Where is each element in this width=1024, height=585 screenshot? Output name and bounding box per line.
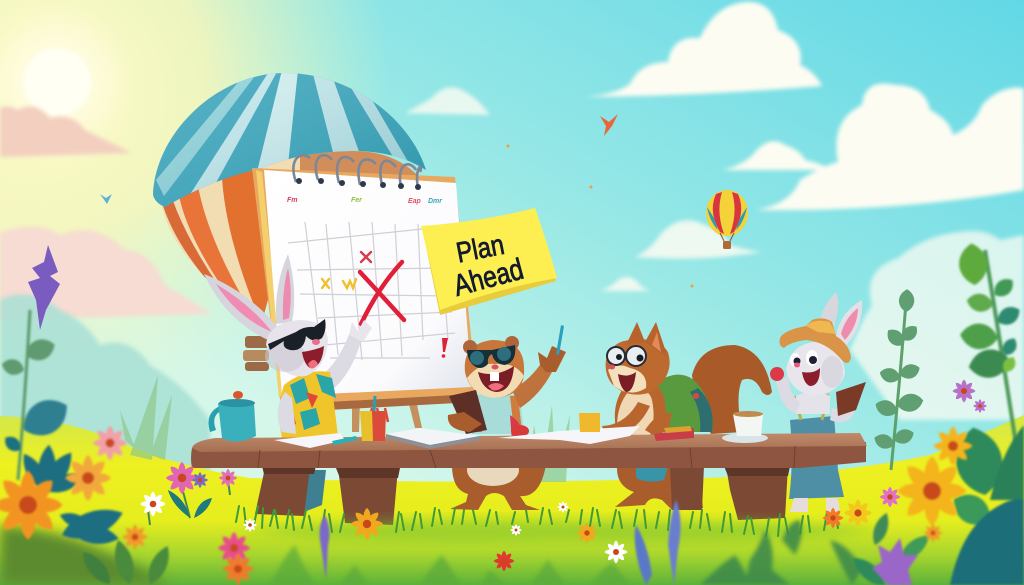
big red X (360, 262, 404, 324)
purple spikes foreground (320, 500, 918, 585)
chipmunk raised arm (512, 362, 552, 408)
maple-like teal leaves (17, 450, 52, 494)
rabbit ears (818, 292, 838, 332)
red apple (511, 425, 529, 437)
exclamation mark (442, 338, 448, 358)
table front (191, 442, 866, 468)
balloon basket (243, 336, 269, 371)
open book (386, 428, 480, 445)
calendar pages (256, 170, 285, 398)
foreground blurred flowers (0, 426, 973, 585)
stacked books (654, 428, 694, 441)
red fruit (770, 367, 784, 381)
chipmunk hand and left arm (448, 412, 482, 432)
distant teal hills (0, 294, 210, 480)
rabbit ear up (276, 254, 294, 324)
rabbit sunglasses (268, 319, 326, 350)
rabbit ear left (204, 274, 282, 340)
feet (790, 498, 840, 512)
papers right (498, 426, 640, 444)
background meadow plants (120, 289, 925, 482)
rabbit in hat and overalls (770, 292, 866, 512)
right large green plant (957, 242, 1024, 470)
squirrel arm (602, 402, 650, 436)
rabbit book (836, 382, 866, 416)
calendar month labels: Dmr (428, 198, 443, 205)
bird blue (100, 194, 112, 204)
grass blades near table (236, 506, 880, 541)
sticky note text (450, 228, 527, 302)
chipmunk head (465, 340, 524, 398)
teapot (208, 391, 256, 442)
pencil cup (360, 396, 388, 441)
squirrel backpack (652, 375, 713, 432)
table legs (255, 466, 788, 525)
sun (0, 22, 117, 142)
big hot air balloon (150, 70, 440, 371)
flowers (0, 380, 987, 585)
straw hat (780, 318, 851, 363)
small hot air balloon (706, 190, 748, 249)
rabbit left arm on table (278, 392, 296, 434)
overalls (789, 416, 844, 499)
chipmunk ears (463, 340, 477, 354)
raised arm (316, 332, 362, 395)
bird orange (600, 114, 618, 136)
sticky note (421, 208, 557, 315)
balloon lower striped body (162, 151, 416, 313)
balloon striped canopy (150, 70, 430, 210)
cloud: small top centre (405, 87, 490, 115)
cloud: tiny (600, 277, 652, 291)
calendar month labels (287, 197, 443, 205)
calendar sheet (264, 170, 472, 396)
cloud: right low (850, 231, 1024, 420)
cloud: centre low (635, 220, 762, 259)
chipmunk book (449, 390, 487, 434)
squirrel glasses (607, 346, 646, 366)
marker (332, 436, 357, 445)
olive bush (0, 525, 170, 585)
squirrel tail (692, 345, 772, 434)
easel legs (352, 400, 422, 432)
bottom-left plants (0, 310, 175, 585)
rabbit arms (776, 376, 800, 414)
table items (208, 391, 768, 449)
cloud: large right (755, 84, 1024, 210)
sticky note text: Ahead (450, 251, 527, 302)
chipmunk sunglasses (467, 345, 515, 368)
blue leg (304, 470, 326, 512)
papers left (274, 433, 345, 448)
pink clouds left (0, 106, 212, 320)
squirrel head (606, 339, 670, 395)
white clouds (405, 2, 1024, 420)
easel back board (252, 168, 477, 407)
squirrel mouth (618, 372, 636, 392)
squirrel body (615, 383, 666, 436)
foreground soft greens (270, 520, 862, 585)
dark teal corner leaf (950, 500, 1024, 585)
cloud: beside balloon (722, 141, 832, 170)
lavender spike (28, 245, 60, 330)
easel with calendar (252, 155, 477, 432)
rabbit mouth (302, 346, 324, 368)
calendar month labels: Fm (287, 197, 298, 204)
calendar spiral holes (296, 178, 421, 190)
table surface (192, 433, 867, 452)
squirrel legs (615, 466, 703, 510)
rabbit mouth (802, 368, 820, 386)
calendar month labels: Fer (351, 197, 363, 204)
rabbit eyes (790, 353, 800, 367)
rabbit with sunglasses (204, 254, 372, 512)
calendar small marks (322, 252, 371, 288)
calendar month labels: Eap (408, 198, 422, 205)
shirt (279, 371, 338, 438)
easel ledge (328, 394, 475, 410)
sticky note text: Plan (454, 228, 507, 269)
tiny birds and specks (100, 114, 694, 288)
squirrel with glasses (602, 322, 713, 510)
yellow cup (579, 413, 600, 432)
chipmunk torso (472, 393, 524, 434)
calendar spiral rings (293, 155, 421, 188)
right bush and dark leaves (848, 424, 1024, 585)
chipmunk lower body (450, 465, 546, 510)
rabbit head (786, 342, 845, 396)
cloud: top right (582, 2, 822, 97)
small mid-ground flower plants (148, 480, 230, 525)
squirrel ears (626, 322, 668, 358)
blue pen (556, 325, 564, 355)
chipmunk with sunglasses (448, 325, 566, 510)
rabbit head (266, 320, 328, 376)
calendar grid (288, 222, 455, 360)
chipmunk mouth (478, 366, 514, 392)
table (191, 433, 867, 525)
coffee cup and saucer (722, 411, 768, 443)
grass meadow (0, 415, 1024, 585)
plant: fern right (872, 289, 925, 470)
